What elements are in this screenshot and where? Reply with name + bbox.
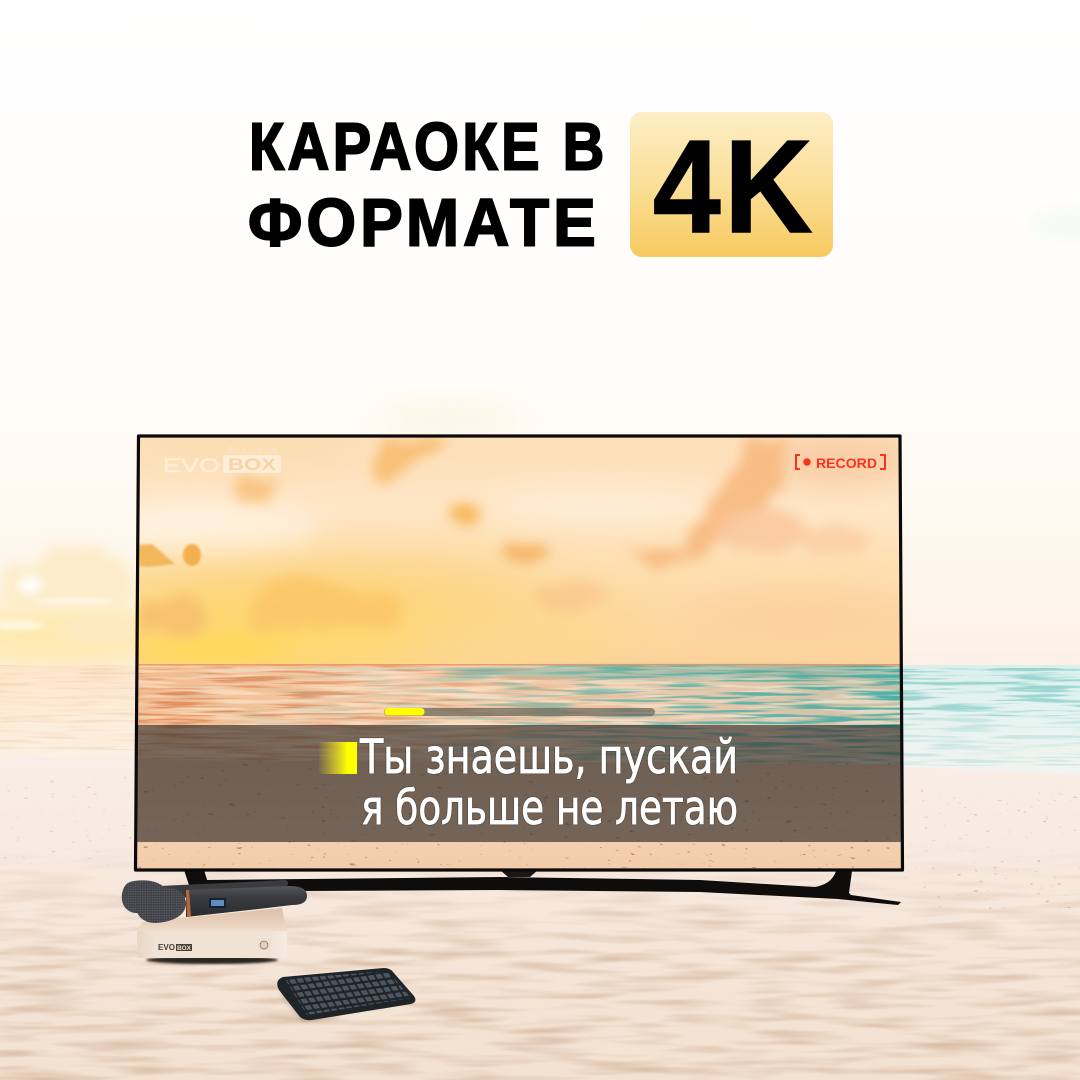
lyrics: я больше не летаю	[361, 781, 738, 836]
logo: EVO BOX: BOX	[228, 455, 277, 474]
record indicator	[796, 455, 885, 471]
logo: EVO BOX	[163, 446, 281, 477]
tv screen	[134, 434, 904, 872]
lyrics cursor	[319, 742, 357, 774]
set-top box: EVO	[158, 943, 175, 952]
badge: 4K: 4K	[653, 112, 812, 260]
title	[248, 109, 604, 260]
lyrics: Ты знаешь, пускай	[359, 730, 738, 785]
background: beach scene	[0, 217, 1080, 1080]
lyrics	[359, 730, 738, 836]
title: ФОРМАТЕ	[248, 185, 596, 260]
title: КАРАОКЕ В	[249, 109, 604, 185]
set-top box	[137, 908, 287, 964]
logo: EVO BOX: EVO	[163, 455, 220, 477]
clouds on tv	[138, 438, 898, 664]
set-top box: BOX	[177, 945, 192, 952]
logo: EVO BOX: PLUS	[228, 446, 277, 454]
tv stand	[184, 870, 901, 905]
record indicator: RECORD	[816, 455, 877, 471]
lyric band	[137, 725, 903, 842]
progress bar	[384, 708, 655, 716]
remote keyboard	[277, 968, 415, 1022]
microphones	[122, 880, 307, 923]
sea on tv	[137, 664, 960, 765]
